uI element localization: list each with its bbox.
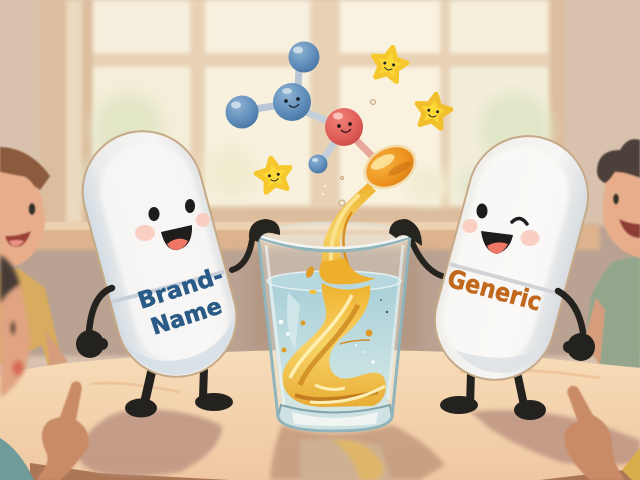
atom: centre blue with face: [273, 83, 311, 121]
face: [135, 199, 210, 250]
oil capsule: [356, 136, 424, 198]
face: [462, 204, 540, 254]
label: Brand-Name: Name: [148, 293, 225, 341]
glass base: [278, 405, 392, 431]
table shadow: right pill: [470, 410, 640, 465]
glass walls: [258, 235, 410, 431]
glass reflection on table: [270, 425, 445, 480]
water: [268, 282, 400, 412]
oil top at surface: [319, 258, 376, 284]
background child: right with dark hair and green shirt: [584, 139, 640, 368]
arm and hand: [558, 291, 595, 361]
glass of water with swirling oil: [258, 235, 410, 431]
round table: [0, 350, 640, 480]
star: right: [414, 91, 453, 129]
glass back wall: [258, 223, 410, 431]
table shadow: left pill: [78, 410, 222, 476]
label: Brand-Name: [135, 263, 227, 341]
pill character: Brand-Name: [69, 118, 250, 417]
pointing hand: [36, 381, 89, 480]
atom: small blue: [308, 154, 328, 174]
pill character: Generic: [421, 123, 602, 420]
label: Brand-Name: Brand-: [135, 263, 227, 315]
background child: left with brown hair and yellow shirt: [0, 147, 68, 366]
head and hair: [0, 255, 30, 398]
small bubbles: [322, 100, 376, 206]
star: lower left: [254, 155, 293, 193]
atom: red with face: [325, 108, 363, 146]
stars with smiling faces: [254, 44, 453, 193]
atom: top blue: [288, 42, 320, 72]
atom: left blue: [226, 96, 258, 128]
arm and hand: [76, 288, 112, 358]
water surface: [267, 271, 401, 291]
legs and feet: [125, 368, 233, 418]
molecule: [226, 42, 374, 174]
legs and feet: [440, 372, 546, 420]
glass rim: [258, 236, 410, 250]
arm: generic pill holding glass: [412, 242, 442, 276]
capsule body: [69, 118, 250, 390]
foreground child: left, blurred face and pointing hand: [0, 255, 89, 480]
air bubbles: [279, 299, 388, 364]
bonds: [255, 68, 374, 158]
capsule body: [421, 123, 602, 393]
star: top right: [369, 44, 409, 83]
foreground child: right, pointing hand: [565, 386, 640, 480]
oil stream pouring into glass: [321, 183, 376, 285]
arm: brand-name pill holding glass: [232, 240, 252, 270]
swirling oil: [282, 283, 386, 407]
hands gripping the glass rim: [249, 219, 422, 246]
label: Generic: Generic: [444, 264, 545, 317]
sleeve: [622, 448, 640, 480]
shirt: [0, 438, 34, 480]
oil droplets: [282, 265, 317, 352]
